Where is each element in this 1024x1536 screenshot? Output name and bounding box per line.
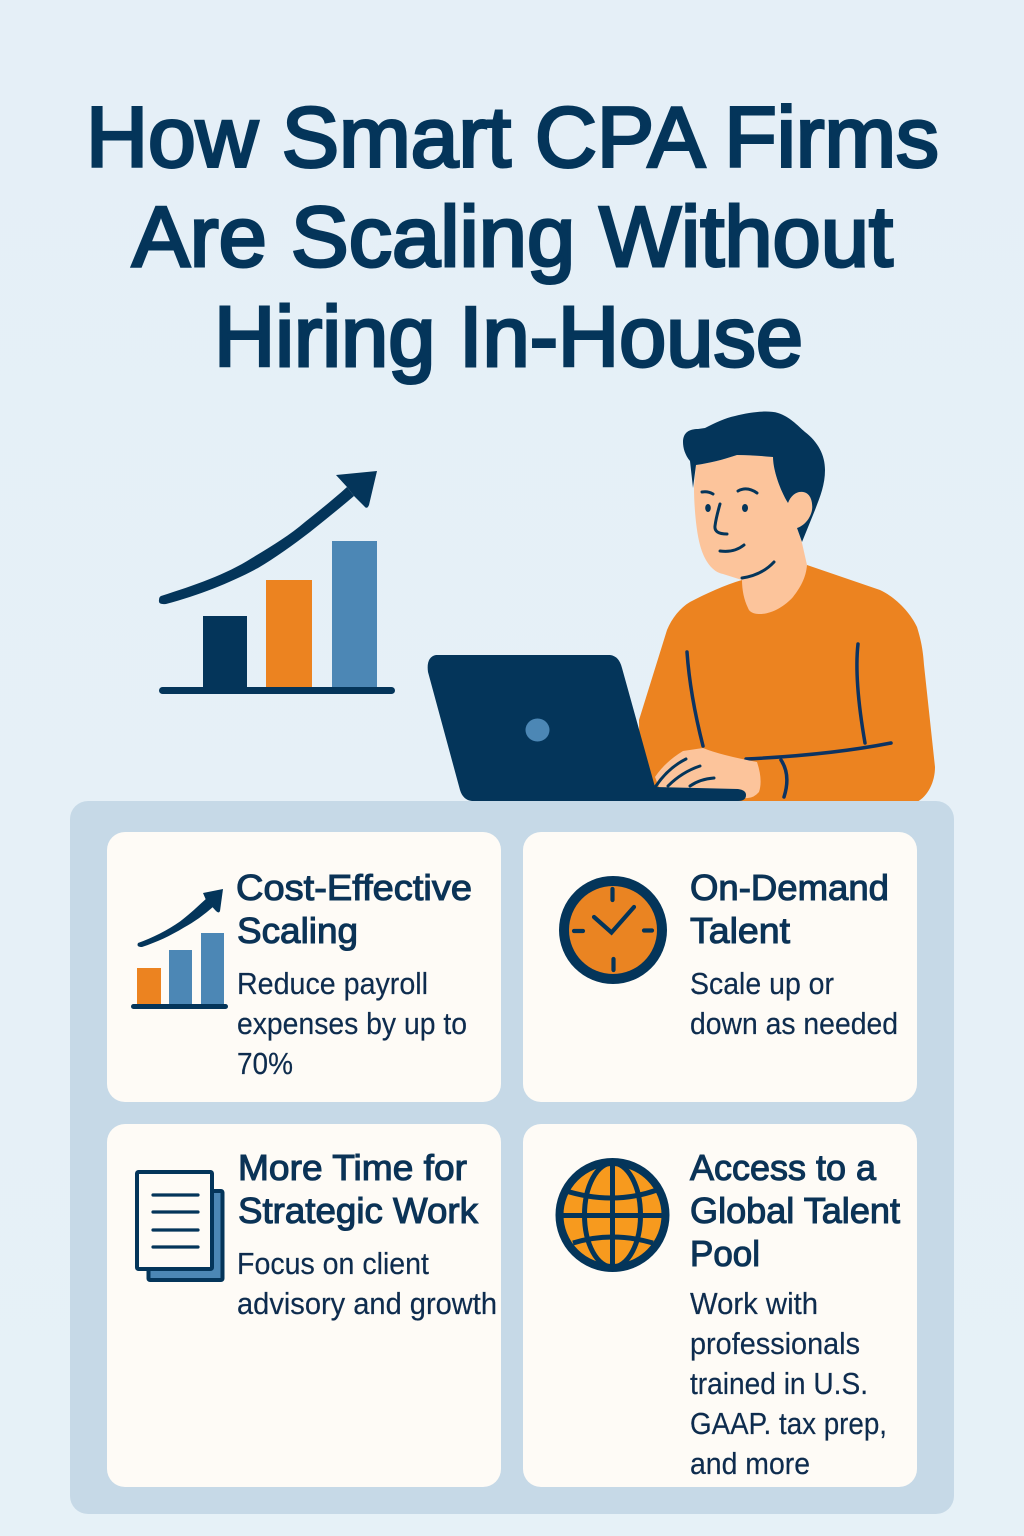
body text: Reduce payroll — [237, 966, 428, 1001]
chart illustration: rising bars with arrow — [159, 471, 395, 694]
body text: 70% — [237, 1046, 293, 1081]
heading: Scaling — [237, 910, 358, 951]
heading: Pool — [690, 1233, 760, 1274]
hair — [683, 412, 825, 542]
heading: Access to a — [690, 1147, 877, 1188]
card: cost-effective scaling — [107, 832, 501, 1102]
body text: Scale up or — [690, 966, 834, 1001]
body text: expenses by up to — [237, 1006, 467, 1041]
body text: GAAP. tax prep, — [690, 1406, 887, 1441]
heading: More Time for — [238, 1147, 467, 1188]
title: How Smart CPA Firms — [86, 90, 939, 186]
card: global talent pool — [523, 1124, 917, 1487]
heading — [690, 867, 889, 951]
heading — [690, 1147, 900, 1274]
heading — [236, 867, 472, 951]
heading: Global Talent — [690, 1190, 900, 1231]
title — [86, 90, 939, 385]
card: on-demand talent — [523, 832, 917, 1102]
body text — [690, 1286, 887, 1481]
body text: down as needed — [690, 1006, 898, 1041]
heading: Cost-Effective — [236, 867, 472, 908]
body text: and more — [690, 1446, 810, 1481]
icon: globe — [560, 1162, 666, 1268]
body text: Work with — [690, 1286, 818, 1321]
face details — [702, 489, 774, 578]
sweater — [639, 565, 935, 802]
body text: Focus on client — [237, 1246, 429, 1281]
heading: Talent — [690, 910, 790, 951]
heading: Strategic Work — [238, 1190, 479, 1231]
neck and face — [694, 455, 812, 614]
person illustration at laptop — [428, 412, 935, 802]
body text — [690, 966, 898, 1041]
icon: growth bars — [131, 889, 228, 1009]
body text: advisory and growth — [237, 1286, 497, 1321]
card: more time for strategic work — [107, 1124, 501, 1487]
title: Hiring In-House — [214, 290, 803, 385]
sleeve lines — [687, 644, 891, 797]
title: Are Scaling Without — [132, 190, 893, 285]
panel: benefits — [70, 801, 954, 1514]
laptop — [428, 655, 746, 801]
body text: trained in U.S. — [690, 1366, 868, 1401]
body text: professionals — [690, 1326, 860, 1361]
body text — [237, 966, 467, 1081]
icon: document stack — [137, 1172, 222, 1280]
body text — [237, 1246, 497, 1321]
icon: clock — [559, 876, 667, 984]
heading: On-Demand — [690, 867, 889, 908]
heading — [238, 1147, 479, 1231]
hand — [655, 748, 761, 798]
